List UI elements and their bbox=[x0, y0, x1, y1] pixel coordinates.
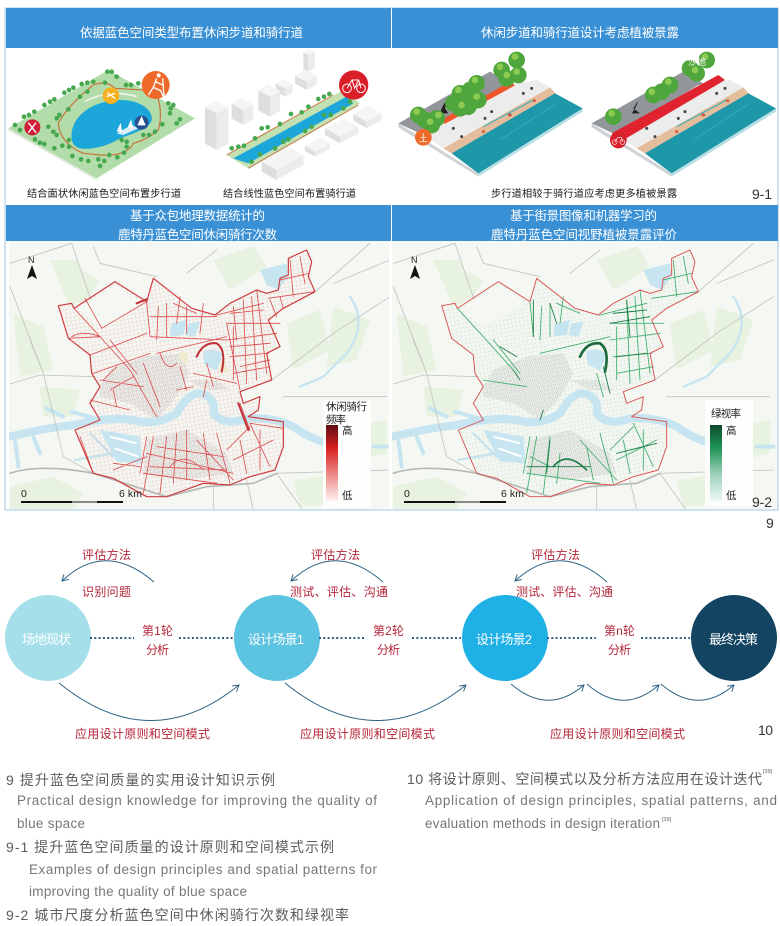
legend: green view rate bbox=[705, 400, 753, 506]
node: final decision: 最终决策 bbox=[709, 632, 758, 647]
node: design scenario 2: 设计场景2 bbox=[476, 632, 532, 647]
illustration: walking path street section bbox=[398, 57, 583, 177]
caption block: figure 10 notes bbox=[407, 769, 777, 831]
caption block: figure 9 notes: improving the quality of blue space bbox=[29, 884, 247, 899]
round labels: 第1轮 bbox=[142, 624, 173, 638]
heading: vegetation exposure bbox=[392, 8, 778, 48]
legend: green view rate: 绿视率 bbox=[711, 407, 741, 420]
labels: apply principles and patterns: 应用设计原则和空间模式 bbox=[550, 726, 685, 741]
labels: evaluation methods: 评估方法 bbox=[311, 547, 360, 562]
icon: north arrow right bbox=[410, 255, 420, 279]
heading: recreational cycling map: 鹿特丹蓝色空间休闲骑行次数 bbox=[118, 227, 277, 242]
heading: recreational cycling map: 基于众包地理数据统计的 bbox=[130, 208, 265, 223]
node: final decision bbox=[691, 595, 777, 681]
caption block: figure 9 notes: 9-2 城市尺度分析蓝色空间中休闲骑行次数和绿视率 bbox=[6, 907, 349, 923]
node: design scenario 1: 设计场景1 bbox=[248, 632, 304, 647]
icon: red bicycle badge bbox=[610, 132, 627, 148]
round labels: 分析 bbox=[608, 643, 631, 657]
scale bar left bbox=[21, 488, 142, 503]
round labels bbox=[142, 624, 635, 657]
labels: evaluation methods bbox=[82, 547, 613, 599]
caption block: figure 10 notes: evaluation methods in design iteration bbox=[425, 816, 660, 831]
node: site condition bbox=[5, 595, 91, 681]
icon: orange hiker bbox=[142, 71, 170, 99]
node: design scenario 1 bbox=[234, 595, 320, 681]
scale bar left: 0 bbox=[21, 488, 27, 500]
caption block: figure 9 notes: Examples of design principles and spatial patterns for bbox=[29, 862, 378, 877]
caption block: figure 10 notes: [39] bbox=[763, 769, 773, 775]
arrows: evaluation loops bbox=[62, 561, 607, 582]
heading: street view greenery map bbox=[392, 205, 778, 242]
heading: recreational cycling map bbox=[6, 205, 391, 242]
caption block: figure 10 notes: 10 将设计原则、空间模式以及分析方法应用在设计迭代 bbox=[407, 771, 762, 787]
round labels: 第2轮 bbox=[373, 624, 404, 638]
labels: evaluation methods: 评估方法 bbox=[82, 547, 131, 562]
scale bar right: 0 bbox=[404, 488, 410, 500]
labels: apply principles and patterns: 应用设计原则和空间模式 bbox=[75, 726, 210, 741]
icon: red bicycle bbox=[339, 70, 368, 100]
caption block: figure 10 notes: Application of design principles, spatial patterns, and bbox=[425, 793, 777, 808]
labels: evaluation methods: 评估方法 bbox=[531, 547, 580, 562]
heading: blue space type layout: 依据蓝色空间类型布置休闲步道和骑行道 bbox=[80, 25, 303, 40]
caption: park walking path: 结合面状休闲蓝色空间布置步行道 bbox=[27, 187, 181, 200]
node: site condition: 场地现状 bbox=[22, 632, 71, 647]
legend: cycling frequency: 低 bbox=[342, 489, 353, 502]
dotted connectors bbox=[90, 637, 690, 639]
caption block: figure 9 notes: Practical design knowledge for improving the quality of bbox=[17, 793, 377, 808]
caption: walking vs cycling vegetation: 步行道相较于骑行道应考虑更多植被景露 bbox=[491, 187, 677, 200]
heading: vegetation exposure: 休闲步道和骑行道设计考虑植被景露 bbox=[481, 25, 679, 40]
caption block: figure 9 notes bbox=[6, 772, 378, 923]
icon: north arrow left bbox=[27, 255, 37, 279]
caption: linear cycle path: 结合线性蓝色空间布置骑行道 bbox=[223, 187, 356, 200]
labels: apply principles and patterns: 应用设计原则和空间模式 bbox=[300, 726, 435, 741]
labels: evaluation methods: 测试、评估、沟通 bbox=[290, 584, 388, 599]
round labels: 分析 bbox=[377, 643, 400, 657]
legend: cycling frequency: 频率 bbox=[326, 413, 346, 426]
arrows: apply design principles bbox=[59, 683, 734, 721]
panel: figure 9 background bbox=[5, 8, 778, 510]
illustration: park with lake and walking path bbox=[8, 70, 195, 180]
heading: blue space type layout bbox=[6, 8, 391, 48]
caption block: figure 10 notes: [39] bbox=[662, 817, 672, 823]
icon: yellow activity badge bbox=[103, 87, 119, 104]
map: street view greenery in Rotterdam bbox=[390, 240, 780, 511]
map: recreational cycling frequency in Rotterdam bbox=[7, 240, 397, 511]
labels: apply principles and patterns bbox=[75, 726, 685, 741]
caption block: figure 9 notes: blue space bbox=[17, 816, 85, 831]
figure number 10: 10 bbox=[758, 722, 773, 738]
scale bar left: 6 km bbox=[119, 488, 142, 500]
scale bar right bbox=[404, 488, 524, 503]
node: design scenario 2 bbox=[462, 595, 548, 681]
legend: green view rate: 高 bbox=[726, 424, 736, 437]
label: white text on trees: 沙地 bbox=[688, 56, 706, 67]
legend: green view rate: 低 bbox=[726, 489, 737, 502]
figure number 9: 9 bbox=[766, 515, 774, 531]
illustration: linear canal with buildings and cycle lane bbox=[205, 49, 382, 180]
icon: blue sailboat bbox=[135, 116, 149, 130]
caption block: figure 9 notes: 9 提升蓝色空间质量的实用设计知识示例 bbox=[6, 772, 275, 788]
legend: cycling frequency bbox=[323, 400, 371, 508]
illustration: cycling path street section bbox=[592, 57, 776, 177]
icon: orange walking badge bbox=[415, 129, 432, 146]
round labels: 分析 bbox=[146, 643, 169, 657]
heading: street view greenery map: 基于街景图像和机器学习的 bbox=[510, 208, 657, 223]
chart: design iteration flow bbox=[5, 547, 777, 741]
icon: red rackets bbox=[24, 119, 40, 135]
labels: evaluation methods: 测试、评估、沟通 bbox=[516, 584, 613, 599]
scale bar right: 6 km bbox=[501, 488, 524, 500]
legend: cycling frequency: 休闲骑行 bbox=[326, 400, 368, 413]
round labels: 第n轮 bbox=[604, 624, 635, 638]
caption block: figure 9 notes: 9-1 提升蓝色空间质量的设计原则和空间模式示例 bbox=[6, 839, 334, 855]
figure number 9-2: 9-2 bbox=[752, 494, 772, 510]
labels: evaluation methods: 识别问题 bbox=[82, 585, 131, 599]
heading: street view greenery map: 鹿特丹蓝色空间视野植被景露评价 bbox=[491, 227, 677, 242]
icon: north arrow right: N bbox=[411, 255, 418, 265]
legend: cycling frequency: 高 bbox=[342, 424, 352, 437]
icon: north arrow left: N bbox=[28, 255, 34, 265]
figure number 9-1: 9-1 bbox=[752, 186, 772, 202]
